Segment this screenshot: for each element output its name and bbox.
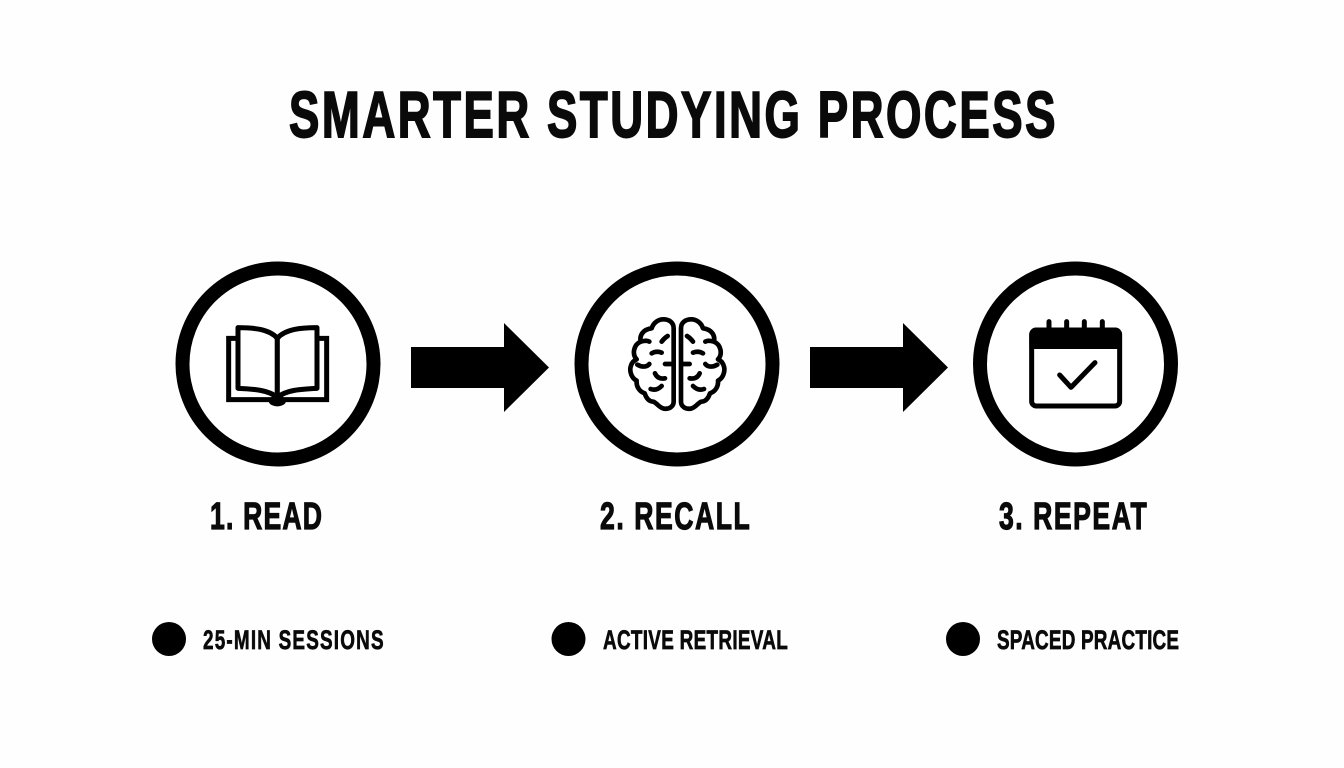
bullet: spaced practice: SPACED PRACTICE [997,625,1179,655]
icon: calendar with check in circle [980,268,1171,460]
bullet: spaced practice [946,622,1179,656]
right hemisphere [681,319,724,409]
arrow: recall to repeat [810,323,948,412]
step 1: read [152,268,384,656]
step 3: repeat [946,268,1179,656]
left hemisphere [630,319,674,409]
icon: brain in circle [582,268,772,460]
step label: 2. RECALL: 2. RECALL [600,494,750,537]
bullet: active retrieval: ACTIVE RETRIEVAL [603,625,788,655]
step 2: recall [552,268,788,656]
step label: 1. READ: 1. READ [210,494,322,537]
bullet: 25-min sessions [152,622,384,656]
arrow: read to recall [411,323,549,412]
step label: 3. REPEAT: 3. REPEAT [999,494,1147,537]
bullet: 25-min sessions: 25-MIN SESSIONS [203,625,384,655]
title: SMARTER STUDYING PROCESS [289,78,1055,151]
bullet: active retrieval [552,622,788,656]
icon: open book in circle [182,268,374,460]
